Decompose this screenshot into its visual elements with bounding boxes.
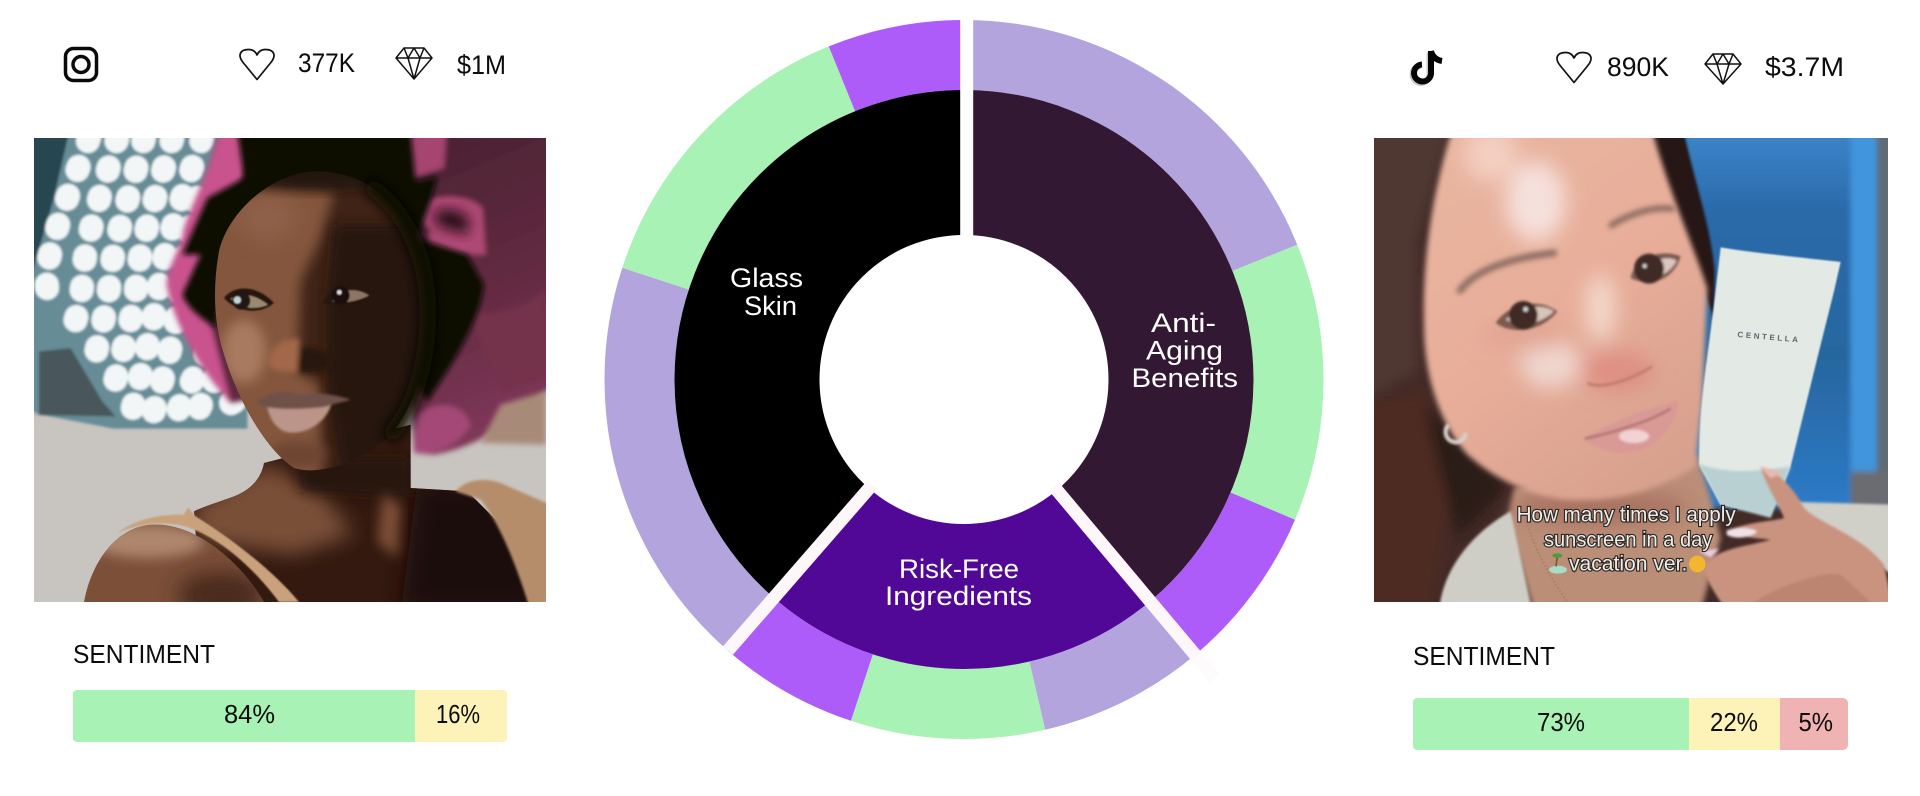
label: anti-aging benefits: Aging [1146, 336, 1223, 366]
soft shadow where face meets hair [367, 185, 428, 438]
blue background [1683, 138, 1888, 512]
earring [1446, 425, 1466, 442]
video caption: vacation ver. [1569, 552, 1687, 576]
lips [1583, 401, 1679, 453]
tube brand: CENTELLA [1737, 330, 1799, 344]
sentiment bar [1413, 698, 1848, 750]
sunscreen tube [1699, 247, 1841, 518]
label: anti-aging benefits [1132, 308, 1238, 393]
ruffle fold [432, 210, 469, 235]
hair left [1374, 138, 1508, 602]
icon: heart [240, 50, 274, 80]
sentiment bar: 16% [436, 699, 480, 729]
tiktok header [1412, 51, 1844, 84]
tan top [454, 478, 546, 602]
icon: instagram [66, 48, 96, 80]
neck and chest [194, 424, 530, 602]
photo: woman with sunscreen tube [1374, 138, 1888, 602]
bonnet tip [481, 391, 546, 445]
eyes [1496, 253, 1681, 330]
nose shadow [1587, 366, 1652, 385]
eyes [224, 286, 374, 311]
skin highlights [1464, 128, 1654, 391]
sentiment bar [73, 690, 507, 742]
video caption: sunscreen in a day [1544, 527, 1713, 551]
label: glass skin [730, 263, 803, 321]
photo: woman with satin bonnet [34, 138, 546, 602]
sentiment bar: 73% [1537, 707, 1585, 737]
label: glass skin: Skin [744, 291, 797, 321]
dark hair right [1653, 138, 1716, 317]
satin bonnet [167, 118, 567, 455]
sentiment label: SENTIMENT [1413, 641, 1555, 671]
lattice window [34, 138, 249, 430]
tiktok sentiment [1413, 641, 1848, 750]
sentiment bar: 5% [1798, 707, 1833, 737]
necklace [1527, 525, 1567, 602]
icon: heart [1557, 52, 1591, 82]
hand [1699, 466, 1894, 611]
strap [117, 507, 299, 602]
segment gaps [728, 20, 1215, 678]
label: risk-free ingredients [885, 554, 1032, 611]
label: risk-free ingredients: Ingredients [885, 581, 1032, 611]
instagram sentiment [73, 639, 507, 742]
face [215, 172, 422, 470]
inner ring segments [747, 162, 1181, 596]
face [1424, 125, 1707, 500]
icon: diamond [396, 48, 432, 79]
label: anti-aging benefits: Benefits [1132, 363, 1238, 393]
sentiment bar: 84% [224, 699, 275, 729]
outer ring segments [640, 55, 1288, 704]
shirt [1439, 501, 1901, 611]
label: risk-free ingredients: Risk-Free [899, 554, 1019, 584]
likes value: 890K [1607, 52, 1669, 82]
hair [182, 131, 484, 401]
sentiment bar: 22% [1710, 707, 1758, 737]
sentiment label: SENTIMENT [73, 639, 215, 669]
nose [269, 338, 331, 373]
neck [1507, 455, 1721, 611]
revenue value: $3.7M [1765, 52, 1844, 82]
video caption [1517, 502, 1736, 576]
eyebrows [1460, 208, 1672, 291]
likes value: 377K [298, 48, 355, 78]
emoji: island [1549, 553, 1567, 574]
label: anti-aging benefits: Anti- [1151, 308, 1216, 338]
icon: diamond [1705, 54, 1741, 84]
label: glass skin: Glass [730, 263, 803, 293]
instagram header [66, 48, 506, 80]
video caption: How many times I apply [1517, 502, 1736, 526]
shoulder [84, 524, 264, 602]
donut chart [640, 20, 1288, 704]
lips [257, 392, 351, 433]
revenue value: $1M [457, 50, 506, 80]
icon: tiktok [1412, 51, 1442, 83]
emoji: sun [1689, 556, 1706, 572]
